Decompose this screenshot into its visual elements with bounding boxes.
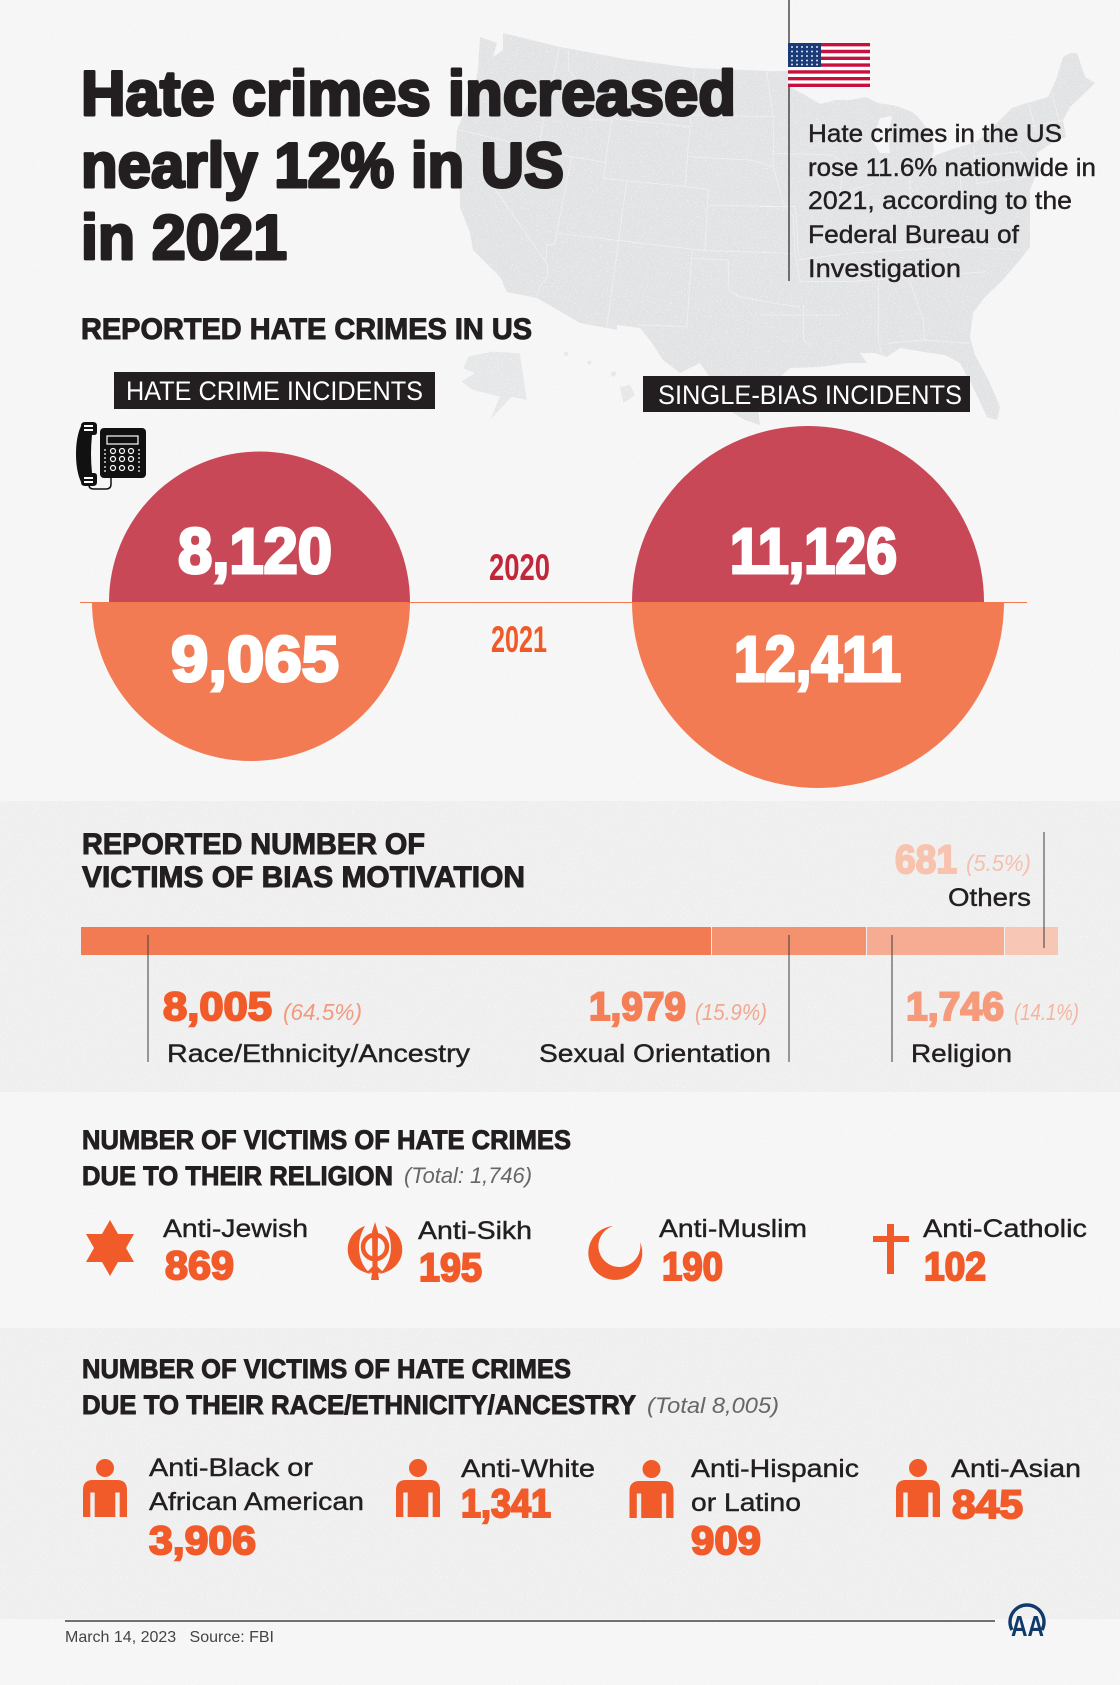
callout: religion: (14.1%) — [1014, 999, 1079, 1025]
heading: religion — [82, 1125, 571, 1191]
item: anti-Asian — [951, 1455, 1081, 1527]
item: anti-Black or African American: African American — [149, 1488, 364, 1516]
callout: race/ethnicity/ancestry — [163, 985, 471, 1068]
item: anti-Muslim: 190 — [662, 1245, 723, 1289]
icon: cross — [873, 1224, 909, 1274]
item: anti-Black or African American: Anti-Black or — [149, 1454, 313, 1482]
stacked bar chart — [81, 927, 1058, 955]
intro text: 2021, according to the — [808, 187, 1072, 215]
item: anti-Sikh — [418, 1217, 532, 1290]
icon: US flag — [788, 43, 870, 87]
heading: race/ethnicity/ancestry: (Total 8,005) — [647, 1393, 779, 1418]
chart: hate crime incidents semicircles: 8,120 — [178, 515, 332, 587]
callout: sexual orientation: Sexual Orientation — [539, 1040, 771, 1068]
item: anti-Sikh: 195 — [419, 1246, 482, 1290]
item: anti-Jewish: Anti-Jewish — [163, 1215, 308, 1243]
heading: race/ethnicity/ancestry: DUE TO THEIR RACE/ETHNICITY/ANCESTRY — [82, 1390, 636, 1420]
item: anti-Hispanic or Latino: Anti-Hispanic — [691, 1455, 859, 1483]
heading: religion: (Total: 1,746) — [404, 1163, 532, 1188]
callout: sexual orientation — [539, 985, 771, 1068]
callout: others: Others — [948, 884, 1031, 912]
panel: hate crime incidents label: HATE CRIME INCIDENTS — [126, 376, 423, 406]
item: anti-Black or African American — [149, 1454, 364, 1563]
item: anti-Jewish: 869 — [165, 1244, 234, 1288]
item: anti-Black or African American: 3,906 — [149, 1519, 256, 1563]
icon: star of David — [86, 1220, 134, 1276]
item: anti-Sikh: Anti-Sikh — [418, 1217, 532, 1245]
icon: telephone — [76, 422, 146, 489]
map: United States silhouette — [455, 33, 1095, 425]
callout: race/ethnicity/ancestry: (64.5%) — [283, 999, 362, 1025]
callout: others: (5.5%) — [966, 850, 1031, 876]
intro text: Investigation — [808, 255, 961, 283]
item: anti-Hispanic or Latino: or Latino — [691, 1489, 801, 1517]
callout: religion: 1,746 — [906, 985, 1004, 1029]
heading: reported hate crimes: REPORTED HATE CRIMES IN US — [81, 313, 532, 346]
callout: sexual orientation: (15.9%) — [695, 999, 767, 1025]
callout: others: 681 — [895, 838, 957, 882]
heading: religion: DUE TO THEIR RELIGION — [82, 1161, 393, 1191]
item: anti-Catholic: 102 — [924, 1245, 986, 1289]
heading: race/ethnicity/ancestry — [82, 1354, 779, 1420]
item: anti-Asian: 845 — [952, 1483, 1023, 1527]
intro text: Hate crimes in the US — [808, 120, 1062, 148]
heading: bias motivation: REPORTED NUMBER OF — [82, 828, 425, 861]
panel: reported number of victims of bias motivation — [0, 801, 1120, 1092]
item: anti-Hispanic or Latino — [691, 1455, 859, 1563]
icon: person — [630, 1460, 674, 1518]
chart: single-bias incidents semicircles — [632, 426, 1004, 788]
panel: victims due to religion — [82, 1125, 1087, 1290]
intro text: rose 11.6% nationwide in — [808, 154, 1096, 182]
item: anti-Catholic: Anti-Catholic — [923, 1215, 1087, 1243]
icon: person — [396, 1459, 440, 1517]
chart: single-bias incidents semicircles: 11,126 — [730, 515, 897, 587]
icon: person — [83, 1459, 127, 1517]
chart: hate crime incidents semicircles — [92, 452, 410, 761]
panel: victims due to race/ethnicity/ancestry — [0, 1328, 1120, 1619]
source note: March 14, 2023 Source: FBI — [65, 1629, 274, 1646]
heading: religion: NUMBER OF VICTIMS OF HATE CRIMES — [82, 1125, 571, 1155]
callout: race/ethnicity/ancestry: 8,005 — [163, 985, 272, 1029]
item: anti-White: 1,341 — [461, 1482, 551, 1526]
intro text — [808, 120, 1096, 283]
icon: khanda — [348, 1222, 402, 1280]
item: anti-Jewish — [163, 1215, 308, 1288]
title: Hate crimes increased — [81, 59, 736, 129]
title: nearly 12% in US — [81, 131, 564, 201]
item: anti-Muslim — [659, 1215, 807, 1289]
item: anti-Hispanic or Latino: 909 — [691, 1519, 761, 1563]
logo: AA — [1010, 1605, 1044, 1643]
intro text: Federal Bureau of — [808, 221, 1019, 249]
item: anti-Asian: Anti-Asian — [951, 1455, 1081, 1483]
heading: race/ethnicity/ancestry: NUMBER OF VICTIMS OF HATE CRIMES — [82, 1354, 571, 1384]
item: anti-Muslim: Anti-Muslim — [659, 1215, 807, 1243]
legend: year 2021: 2021 — [491, 619, 547, 660]
item: anti-White — [461, 1455, 595, 1526]
callout: religion: Religion — [911, 1040, 1012, 1068]
callout: race/ethnicity/ancestry: Race/Ethnicity/Ancestry — [167, 1040, 471, 1068]
chart: single-bias incidents semicircles: 12,411 — [734, 623, 901, 695]
heading: bias motivation — [82, 828, 525, 894]
logo: AA: AA — [1011, 1611, 1044, 1643]
item: anti-Catholic — [923, 1215, 1087, 1289]
chart: hate crime incidents semicircles: 9,065 — [171, 623, 339, 695]
callout: others — [895, 838, 1031, 912]
vertical rule with flag pole — [788, 0, 790, 281]
heading: bias motivation: VICTIMS OF BIAS MOTIVATION — [82, 861, 525, 894]
icon: crescent — [588, 1226, 642, 1280]
callout: religion — [906, 985, 1079, 1068]
legend: year 2020: 2020 — [489, 547, 550, 588]
title: in 2021 — [81, 203, 287, 273]
panel: single-bias incidents label: SINGLE-BIAS INCIDENTS — [658, 380, 962, 410]
item: anti-White: Anti-White — [461, 1455, 595, 1483]
callout: sexual orientation: 1,979 — [589, 985, 686, 1029]
icon: person — [896, 1459, 940, 1517]
title — [81, 59, 736, 273]
